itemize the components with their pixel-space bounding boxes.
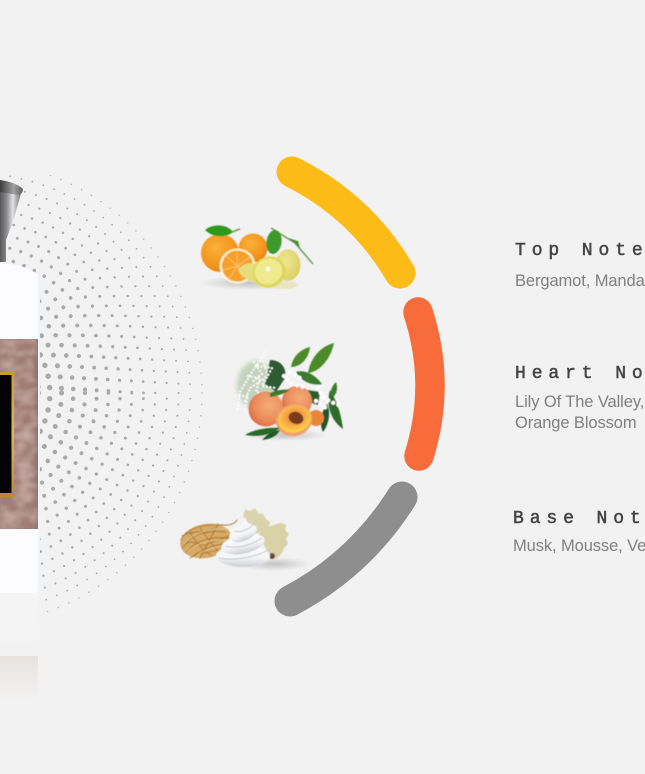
musk shells	[243, 508, 270, 534]
lily of the valley	[236, 352, 285, 412]
perfume bottle	[0, 180, 40, 700]
halftone dotted circle	[0, 161, 202, 625]
icon: vetiver, cream and musk	[177, 508, 311, 571]
icon: citrus fruits	[198, 225, 313, 293]
text: heart notes list: Lily Of The Valley,	[515, 393, 644, 411]
bottle neck	[0, 186, 22, 262]
bottle cap rim	[0, 180, 23, 195]
arc: base notes	[290, 497, 402, 601]
marble label	[0, 339, 38, 529]
text: heart notes list: Orange Blossom	[515, 414, 636, 432]
bottle reflection	[0, 593, 39, 700]
arc: top notes	[292, 172, 400, 273]
text: heart notes list	[515, 393, 644, 432]
bottle body	[0, 263, 40, 593]
lower right leaves	[307, 382, 343, 432]
arc: heart notes	[418, 312, 430, 456]
orange blossom	[284, 372, 339, 408]
gold frame	[0, 372, 14, 497]
vetiver roots	[177, 520, 237, 562]
icon: peach and flowers	[236, 343, 343, 441]
whipped cream	[216, 517, 270, 567]
black panel	[0, 375, 12, 493]
